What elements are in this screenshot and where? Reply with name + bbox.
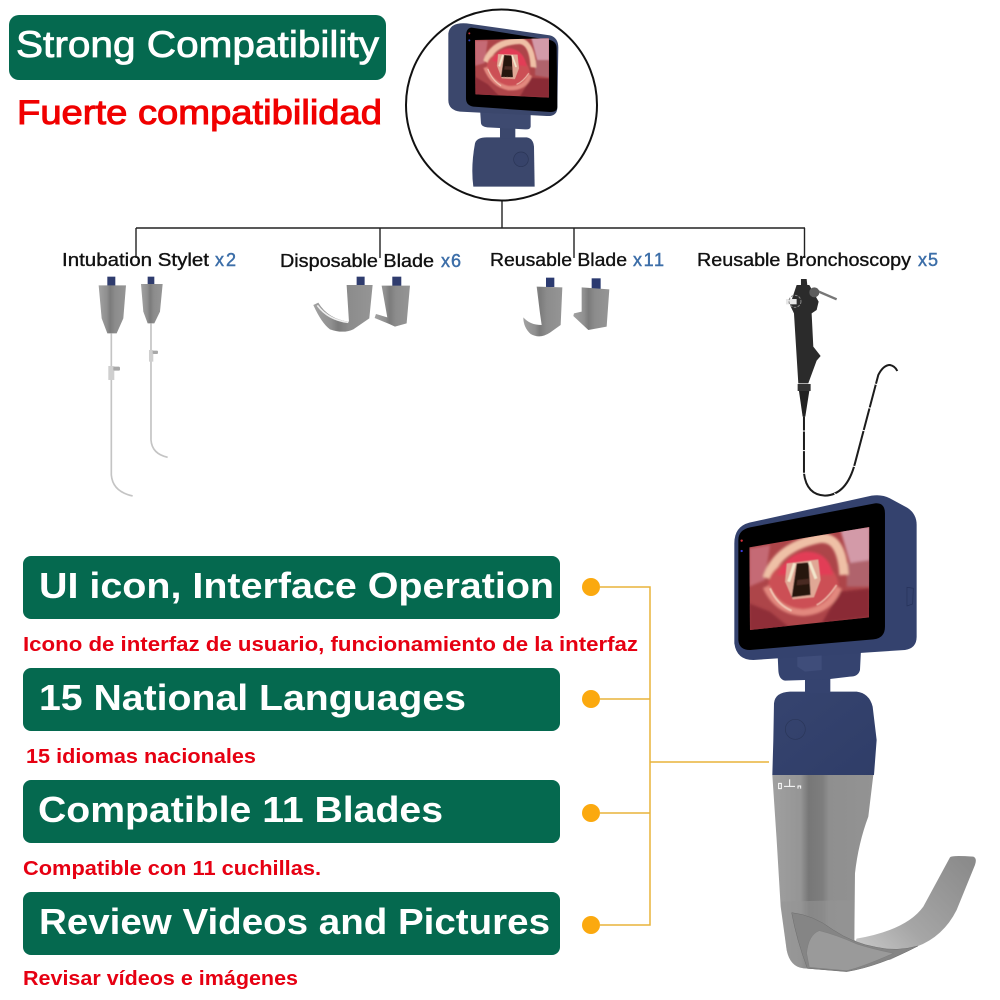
label: Disposable Blade x6: x6 [441,251,461,271]
screen and handle [734,495,917,775]
icon: disposable blades [313,277,410,332]
callout: Review Videos and Pictures: Review Videos and Pictures [39,901,550,942]
icon: orange dot 2 [582,690,600,708]
callout: Compatible 11 Blades [23,780,560,843]
label: Disposable Blade x6: Disposable Blade [280,251,434,271]
callout: 15 National Languages [23,668,560,731]
text: Spanish caption 3: Compatible con 11 cuchillas. [23,858,321,880]
icon: video laryngoscope device [734,495,976,972]
label: Reusable Blade x11: Reusable Blade [490,250,627,270]
panel: compatibility tree lines [136,201,805,258]
heading: Strong Compatibility [9,15,386,80]
text: Spanish caption 4: Revisar vídeos e imágenes [23,968,298,990]
icon: intubation stylets [99,277,168,496]
label: Reusable Blade x11: x11 [633,250,664,270]
icon: orange dot 3 [582,804,600,822]
connector: orange bracket lines [600,587,769,925]
icon: orange dot 1 [582,578,600,596]
heading: Spanish subtitle: Fuerte compatibilidad [17,94,382,132]
blade [772,775,976,972]
label: Reusable Bronchoscopy x5: x5 [918,250,938,270]
callout: Compatible 11 Blades: Compatible 11 Blades [38,789,443,830]
icon: reusable blades [523,278,609,336]
icon: circled device close-up [406,10,597,200]
callout: Review Videos and Pictures [23,892,560,955]
label: Intubation Stylet x2: x2 [215,250,236,270]
text: Spanish caption 1: Icono de interfaz de usuario, funcionamiento de la interfaz [23,634,638,656]
text: Spanish caption 2: 15 idiomas nacionales [26,746,256,768]
label: Reusable Bronchoscopy x5: Reusable Bronchoscopy [697,250,911,270]
callout: UI icon, Interface Operation [23,556,560,619]
heading: Strong Compatibility: Strong Compatibility [16,24,380,65]
label: Intubation Stylet x2: Intubation Stylet [62,250,209,270]
icon: reusable bronchoscope [786,279,897,496]
callout: 15 National Languages: 15 National Languages [39,677,466,718]
icon: orange dot 4 [582,916,600,934]
callout: UI icon, Interface Operation: UI icon, Interface Operation [39,565,554,606]
